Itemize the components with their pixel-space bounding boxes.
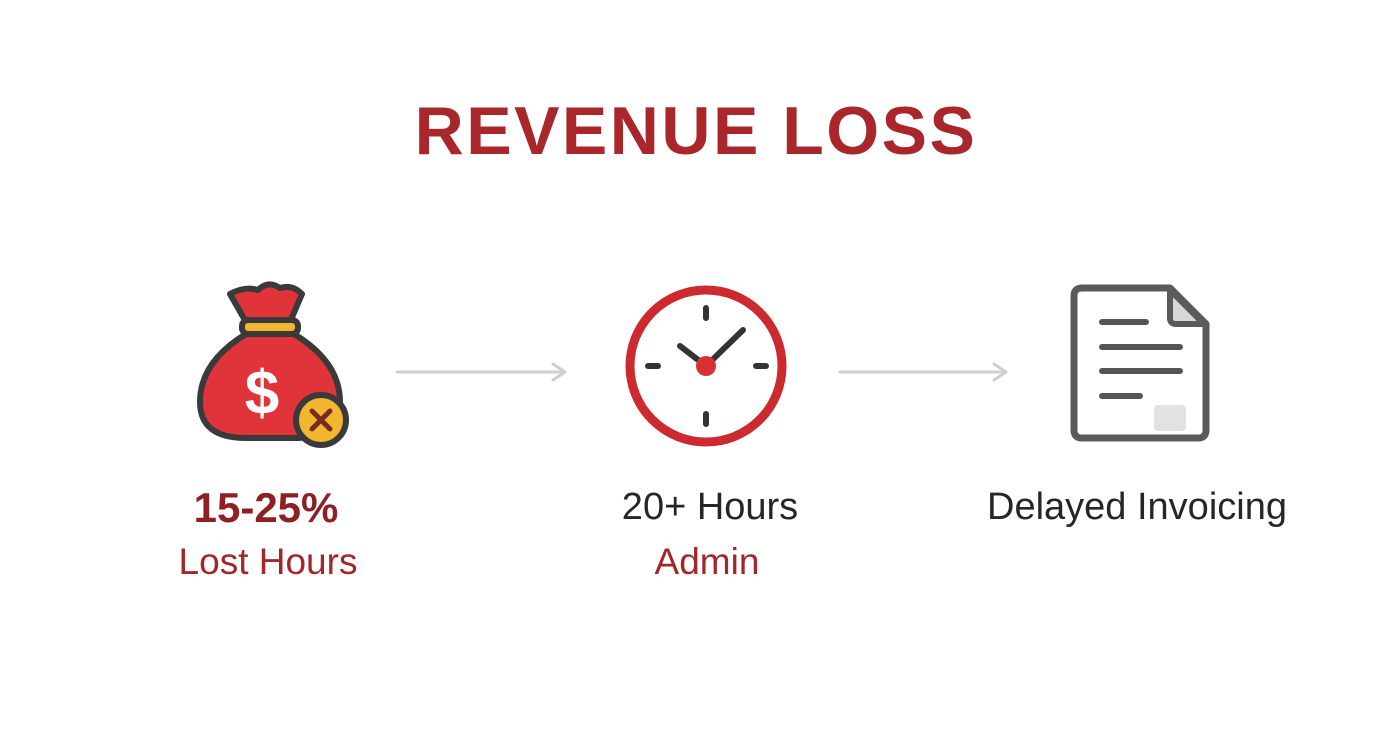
title: REVENUE LOSS — [415, 93, 977, 169]
arrow 2 — [838, 362, 1008, 382]
stat: delayed invoicing: Delayed Invoicing — [987, 486, 1287, 528]
icon: clock — [626, 286, 786, 446]
arrow 1 — [396, 362, 566, 382]
text: Admin — [655, 541, 759, 582]
stat: admin hours: 20+ Hours — [622, 486, 798, 528]
icon: money bag: $ — [245, 359, 279, 428]
icon: document — [1070, 284, 1210, 442]
icon: money bag — [197, 281, 349, 448]
text: Lost Hours — [179, 541, 357, 582]
stat: lost hours: 15-25% — [194, 484, 338, 531]
